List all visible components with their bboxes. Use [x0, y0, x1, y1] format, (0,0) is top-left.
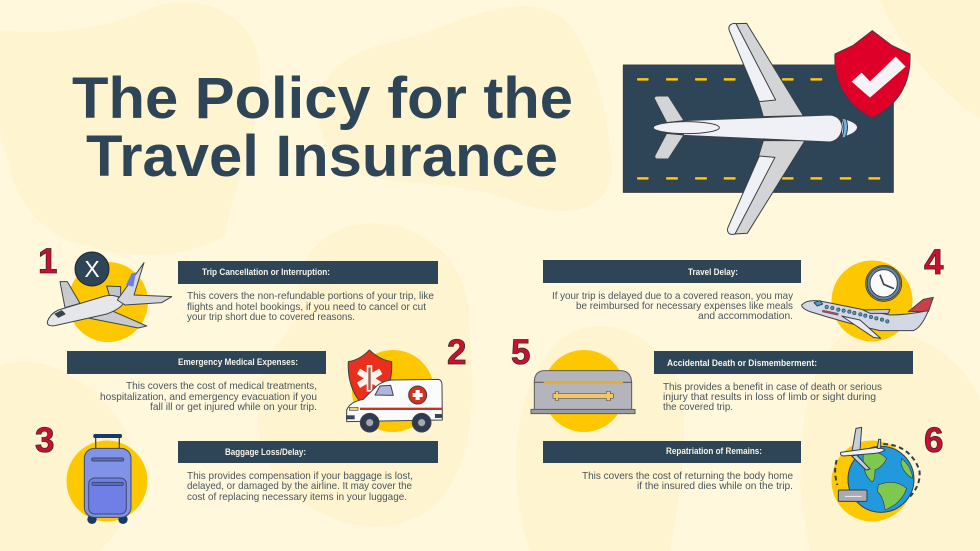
body text: and accommodation. [698, 311, 793, 322]
panel 2: emergency medical [67, 333, 466, 432]
icon: globe with plane and casket [832, 427, 920, 522]
body text: injury that results in loss of limb or sight during [663, 392, 876, 403]
number 1: 1 [38, 242, 57, 281]
heading bar: Travel Delay: [688, 267, 738, 277]
panel 5: accidental death [511, 333, 913, 432]
body text: This provides a benefit in case of death or serious [663, 382, 882, 393]
body text [187, 291, 434, 323]
body text: This covers the cost of medical treatments, [126, 381, 317, 392]
body text: cost of replacing necessary items in your luggage. [187, 492, 407, 503]
panel 6: repatriation [543, 421, 943, 522]
title: The Policy for the [72, 66, 573, 131]
heading bar: Emergency Medical Expenses: [178, 357, 298, 367]
heading bar: Baggage Loss/Delay: [225, 447, 306, 457]
hero illustration: plane on runway with shield [623, 23, 910, 234]
icon: suitcase [66, 434, 148, 524]
icon: coffin [531, 350, 635, 432]
body text [663, 382, 882, 413]
runway [623, 65, 893, 192]
number 4: 4 [924, 243, 944, 282]
title: Travel Insurance [86, 124, 558, 189]
panel 3: baggage [35, 421, 438, 524]
body text [582, 471, 793, 492]
heading bar [543, 441, 801, 463]
heading bar: Repatriation of Remains: [666, 446, 762, 456]
shield with check [835, 31, 910, 118]
body text: fall ill or get injured while on your trip. [150, 402, 317, 413]
icon: airplane with cancel badge: X [84, 256, 100, 282]
heading bar: Trip Cancellation or Interruption: [202, 267, 330, 277]
number 2: 2 [447, 333, 466, 372]
heading bar [178, 261, 438, 284]
heading bar [67, 351, 326, 374]
body text: be reimbursed for necessary expenses like meals [576, 301, 793, 312]
icon: ambulance with shield [346, 350, 442, 432]
body text: This provides compensation if your baggage is lost, [187, 471, 413, 482]
panel 4: travel delay [543, 243, 944, 342]
body text: the covered trip. [663, 402, 733, 413]
body text: delayed, or damaged by the airline. It may cover the [187, 481, 412, 492]
body text [552, 291, 794, 322]
body text: your trip short due to covered reasons. [187, 312, 355, 323]
heading bar [178, 441, 438, 463]
body text: If your trip is delayed due to a covered reason, you may [552, 291, 794, 302]
number 6: 6 [924, 421, 943, 460]
body text: hospitalization, and emergency evacuation if you [100, 392, 317, 403]
body text: if the insured dies while on the trip. [637, 481, 793, 492]
heading bar [654, 351, 913, 374]
airplane [653, 23, 858, 234]
body text [187, 471, 413, 503]
body text: This covers the non-refundable portions of your trip, like [187, 291, 434, 302]
icon: plane and clock [802, 260, 933, 342]
body text: This covers the cost of returning the body home [582, 471, 793, 482]
heading bar [543, 260, 801, 283]
icon: airplane with cancel badge [47, 252, 172, 342]
panel 1: trip cancellation [38, 242, 438, 342]
title [72, 66, 573, 189]
body text: flights and hotel bookings, if you need to cancel or cut [187, 302, 426, 313]
number 5: 5 [511, 333, 530, 372]
body text [100, 381, 317, 413]
number 3: 3 [35, 421, 54, 460]
heading bar: Accidental Death or Dismemberment: [667, 358, 817, 368]
